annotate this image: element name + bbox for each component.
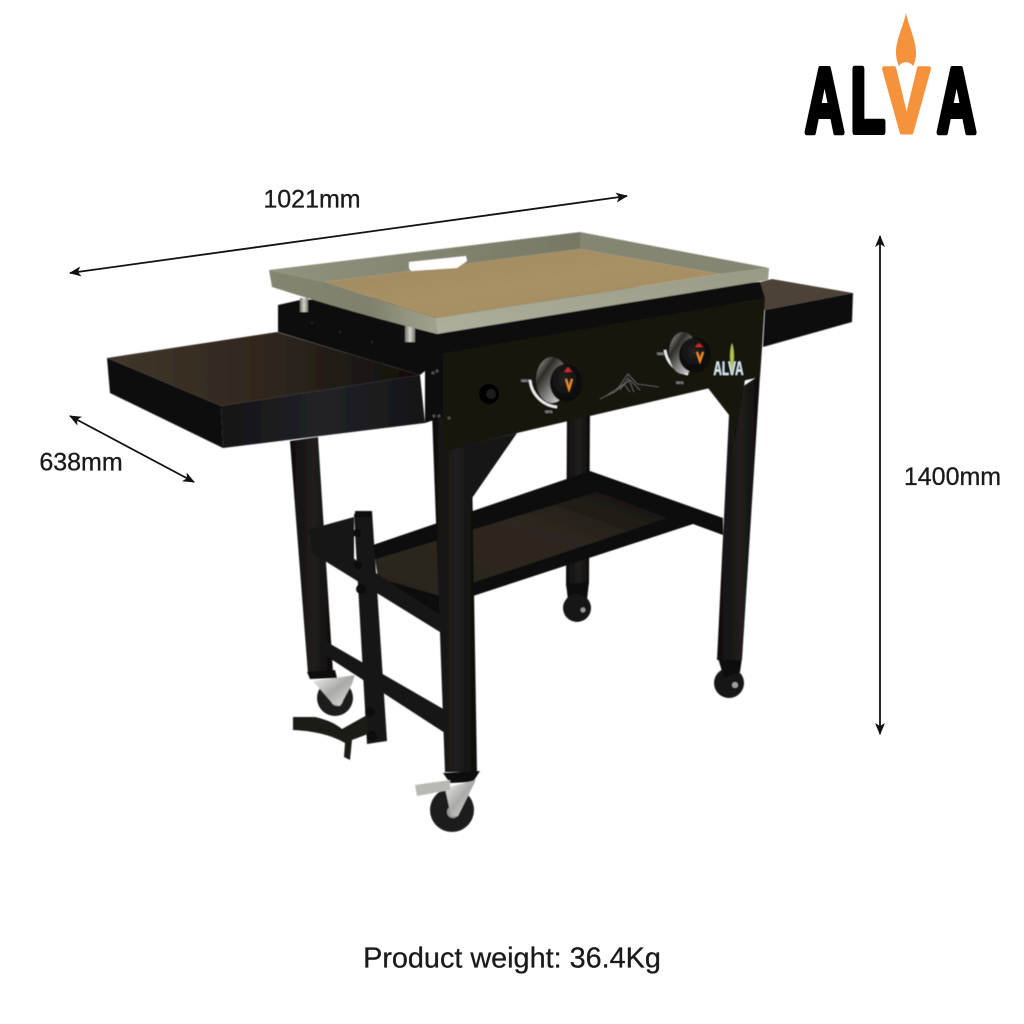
arrow: width: [70, 196, 627, 273]
logo text: V: [884, 49, 930, 152]
dimension: depth 638mm: 638mm: [39, 448, 123, 476]
griddle back walls: [269, 232, 580, 282]
hinge plate: [723, 291, 747, 298]
logo text: A: [805, 50, 844, 153]
dimension: width 1021mm: [70, 186, 627, 273]
right knob: MIN: [676, 380, 683, 385]
right knob: MAX: [657, 351, 666, 356]
right side shelf: [723, 279, 853, 347]
foot pedal handle: [293, 715, 368, 760]
griddle left lip: [269, 270, 437, 334]
mountain graphic: [600, 374, 659, 399]
icon: logo flame: [896, 13, 916, 66]
dimension: height 1400mm: 1400mm: [904, 463, 1001, 491]
left rail and cross bars: [307, 517, 445, 733]
front gusset: [468, 433, 517, 501]
lower shelf: [373, 471, 723, 620]
front left leg and caster: [415, 408, 517, 832]
shelf surface: [376, 492, 667, 596]
left knob: MIN: [545, 409, 552, 414]
dimension: width 1021mm: 1021mm: [263, 186, 361, 214]
logo: ALVA flame wordmark: [805, 13, 976, 153]
griddle cart product illustration: [107, 232, 853, 832]
igniter button: [479, 384, 499, 404]
panel logo: [714, 343, 744, 380]
grease slot: [409, 256, 467, 271]
dimension: depth 638mm: [39, 416, 194, 482]
rear left leg: [290, 437, 333, 674]
griddle cooking plate: [325, 249, 720, 318]
rear right leg and caster: [563, 405, 591, 622]
left knob: [521, 357, 582, 414]
front right leg and caster: [708, 375, 760, 698]
arrow: depth: [70, 416, 194, 482]
front control panel: [432, 298, 765, 452]
logo text: [805, 49, 976, 153]
right knob: [657, 332, 711, 385]
folding side bracket and handle: [293, 511, 387, 760]
arrow: height: [879, 236, 881, 734]
shelf frame and rails: [373, 471, 723, 620]
griddle support posts: [300, 298, 415, 342]
logo text: L: [850, 50, 885, 152]
griddle front lip: [435, 268, 769, 334]
panel logo: ALVA: [714, 359, 744, 380]
left side shelf: [107, 332, 425, 448]
product weight caption: Product weight: 36.4Kg: [363, 942, 661, 974]
left knob: MAX: [521, 378, 530, 383]
rear left caster: [307, 670, 355, 716]
logo text: A: [937, 50, 976, 153]
screws: [432, 370, 450, 420]
griddle top: [269, 232, 769, 334]
frame under griddle: [278, 282, 765, 423]
